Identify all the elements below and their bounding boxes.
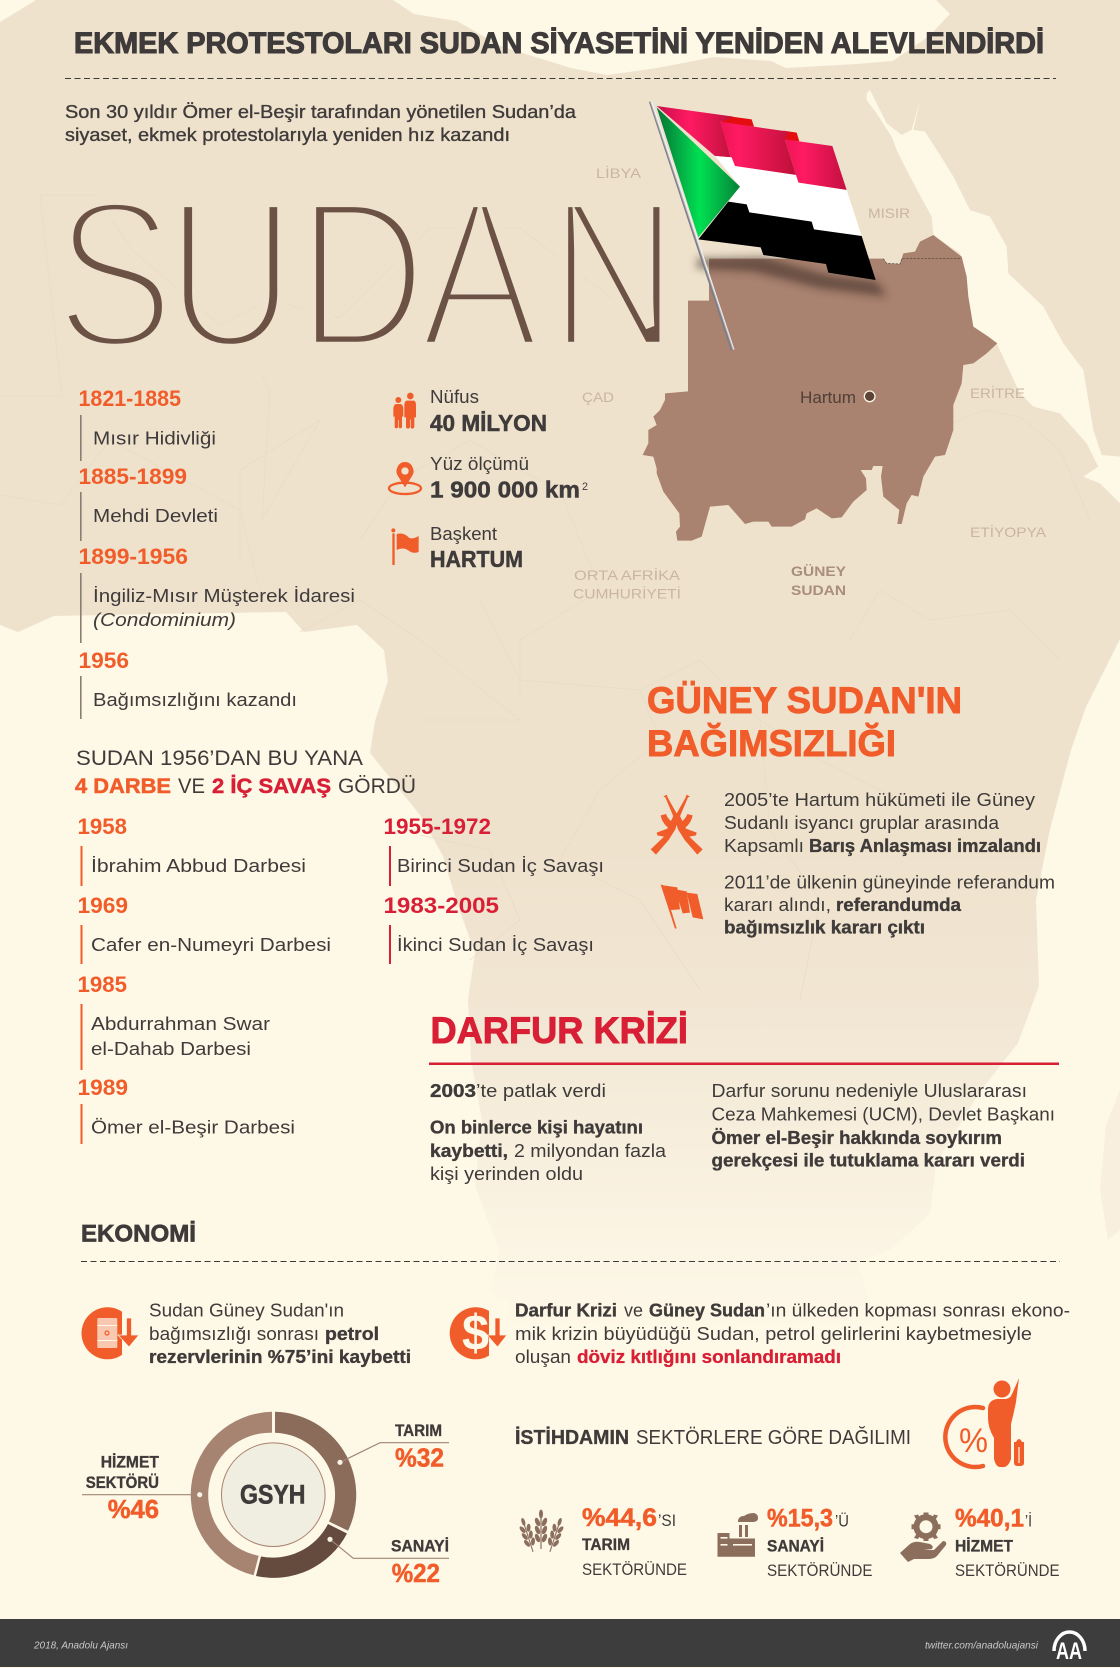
flag of Sudan [651,101,887,350]
timeline: Sudan history: Mısır Hidivliği [93,428,216,448]
icon: dollar with down arrow [450,1300,509,1366]
logo: AA: AA [1056,1638,1082,1665]
heading: SUDAN: SUDAN [55,157,679,392]
timeline: coups: el-Dahab Darbesi [91,1039,251,1059]
text: peace agreement: 2005’te Hartum hükümeti ile Güney [724,790,1035,810]
map labels: MISIR [868,205,910,221]
map labels: ORTA AFRİKA [574,566,681,583]
map labels: ETİYOPYA [970,523,1047,540]
stat: industry employment: ’Ü [835,1512,849,1531]
callout: services: SEKTÖRÜ [86,1473,159,1492]
label: Hartum: Hartum [800,388,856,407]
timeline: Sudan history: 1821-1885 [78,386,181,411]
heading: coups and civil wars: 2 İÇ SAVAŞ [212,775,331,798]
timeline: coups [78,814,331,1144]
timeline: civil wars [384,814,604,964]
intro text: siyaset, ekmek protestolarıyla yeniden hız kazandı [65,125,510,145]
text: left column: On binlerce kişi hayatını [430,1118,643,1138]
block: oil reserves: petrol [325,1324,379,1344]
intro text: Son 30 yıldır Ömer el-Beşir tarafından yönetilen Sudan’da [65,102,577,122]
icon: worker with percent [945,1378,1024,1467]
icon: waving flag [661,885,703,929]
text: left column: ’te patlak verdi [476,1081,606,1101]
block: currency shortage: ve [624,1300,643,1320]
text: peace agreement: Kapsamlı [724,836,804,856]
footer handle: twitter.com/anadoluajansi [925,1640,1039,1652]
text: left column [430,1081,667,1184]
text: left column: kaybetti, [430,1141,508,1161]
text: peace agreement: Sudanlı isyancı gruplar arasında [724,813,1000,833]
text: right column: Ömer el-Beşir hakkında soykırım [712,1128,1002,1148]
chart: GDP donut [82,1412,449,1588]
heading: employment by sector: SEKTÖRLERE GÖRE DAĞILIMI [636,1426,911,1449]
icon: factory [718,1513,758,1557]
block: currency shortage: ’ın ülkeden kopması sonrası ekono- [766,1300,1070,1320]
heading: coups and civil wars: VE [178,775,205,798]
stat: industry employment: SEKTÖRÜNDE [767,1561,872,1580]
block: currency shortage: mik krizin büyüdüğü Sudan, petrol gelirlerini kaybetmesiyle [515,1324,1032,1344]
stat: services employment: SEKTÖRÜNDE [955,1561,1060,1580]
segment: services 46% [191,1412,272,1575]
capital marker [864,391,875,402]
heading: BAĞIMSIZLIĞI [647,723,896,764]
icon: people [393,393,416,429]
callout: industry: SANAYİ [391,1537,449,1556]
stat: capital [391,524,523,572]
block: currency shortage: oluşan [515,1347,571,1367]
map: Sudan [643,235,997,541]
heading: employment by sector [515,1426,911,1449]
stat: population: 40 MİLYON [430,410,547,436]
heading: coups and civil wars: SUDAN 1956’DAN BU YANA [76,747,363,770]
block: currency shortage: Güney Sudan [649,1300,765,1320]
heading: GÜNEY SUDAN'IN [647,680,962,721]
stat: agriculture employment: SEKTÖRÜNDE [582,1560,687,1579]
text: referendum: bağımsızlık kararı çıktı [724,918,925,938]
timeline: coups: 1985 [78,972,127,997]
icon: crossed rifles [651,795,703,855]
text: left column: 2003 [430,1081,476,1101]
text: right column: Darfur sorunu nedeniyle Uluslararası [712,1081,1027,1101]
icon: oil barrel with down arrow [82,1300,142,1366]
timeline: Sudan history: 1956 [78,648,129,673]
text: referendum: referandumda [836,895,962,915]
callout: services: %46 [108,1494,159,1524]
text: peace agreement [724,790,1041,856]
timeline: coups: 1989 [78,1075,128,1100]
stat: agriculture employment: TARIM [582,1535,630,1554]
stat: population: Nüfus [430,387,479,407]
timeline: coups: 1969 [78,893,128,918]
block: currency shortage: döviz kıtlığını sonlandıramadı [577,1347,841,1367]
timeline: coups: Cafer en-Numeyri Darbesi [91,935,331,955]
block: oil reserves: rezervlerinin %75’ini kaybetti [149,1347,411,1367]
icon: gear on hand [900,1512,946,1562]
stat: capital: Başkent [430,524,497,544]
stat: capital: HARTUM [430,546,523,572]
callout: agriculture: TARIM [395,1421,442,1440]
heading: DARFUR KRİZİ [430,1010,688,1051]
text: referendum: 2011’de ülkenin güneyinde referandum [724,872,1055,892]
map labels: SUDAN [791,582,846,598]
text: left column: kişi yerinden oldu [430,1164,583,1184]
text: right column: Ceza Mahkemesi (UCM), Devlet Başkanı [712,1104,1055,1124]
footer credit: 2018, Anadolu Ajansı [33,1640,128,1652]
heading: employment by sector: İSTİHDAMIN [515,1426,629,1449]
center disc [221,1443,325,1546]
icon: worker with percent: % [959,1422,988,1460]
block: oil reserves: bağımsızlığı sonrası [149,1324,319,1344]
timeline: civil wars: 1955-1972 [384,814,491,839]
block: currency shortage [450,1300,1070,1367]
title: EKMEK PROTESTOLARI SUDAN SİYASETİNİ YENİDEN ALEVLENDİRDİ [74,27,1044,60]
icon: flag [391,528,419,565]
stat: agriculture employment: ’SI [658,1511,676,1530]
stat: area: 2 [582,481,588,493]
stat: population [393,387,547,436]
stat: area: Yüz ölçümü [430,454,529,474]
logo: AA [1054,1632,1085,1665]
timeline: Sudan history: (Condominium) [93,610,236,630]
segment: agriculture 32% [275,1412,356,1531]
text: right column: gerekçesi ile tutuklama kararı verdi [712,1150,1025,1170]
map labels [573,164,1047,602]
timeline: Sudan history: İngiliz-Mısır Müşterek İdaresi [93,586,355,606]
stat: agriculture employment: %44,6 [582,1504,657,1532]
stat: area: 1 900 000 km [430,476,580,502]
timeline: Sudan history: 1899-1956 [78,544,188,569]
timeline: civil wars: İkinci Sudan İç Savaşı [397,935,594,955]
text: referendum [724,872,1055,938]
stat: industry employment: SANAYİ [767,1537,824,1556]
text: referendum: kararı alındı, [724,895,831,915]
callout: industry [327,1537,449,1588]
icon: map pin [389,462,421,494]
map labels: CUMHURİYETİ [573,584,681,602]
panel: Darfur crisis [429,1010,1059,1184]
timeline: coups: Ömer el-Beşir Darbesi [91,1118,295,1138]
text: left column: 2 milyondan fazla [514,1141,667,1161]
center label: GSYH [240,1480,306,1510]
map labels: GÜNEY [791,563,847,579]
segment: industry 22% [256,1524,347,1578]
timeline: coups: Abdurrahman Swar [91,1014,270,1034]
footer bar [0,1619,1120,1667]
heading [647,680,962,764]
stat: services employment: %40,1 [955,1505,1024,1533]
map labels: LİBYA [596,164,642,181]
map labels: ÇAD [582,389,614,405]
timeline: Sudan history: 1885-1899 [78,464,187,489]
callout: agriculture: %32 [395,1443,444,1473]
stat: services employment [900,1505,1060,1580]
timeline: Sudan history: Mehdi Devleti [93,506,218,526]
heading: coups and civil wars [75,747,416,798]
block: currency shortage: Darfur Krizi [515,1300,617,1320]
stat: industry employment [718,1505,872,1580]
icon: wheat [516,1510,567,1554]
text: peace agreement: Barış Anlaşması imzalandı [809,836,1041,856]
map labels: ERİTRE [970,384,1025,401]
callout: services [82,1453,202,1524]
timeline: coups: İbrahim Abbud Darbesi [91,856,306,876]
block: oil reserves: Sudan Güney Sudan'ın [149,1300,344,1320]
heading: coups and civil wars: GÖRDÜ [338,775,416,798]
stat: agriculture employment [516,1504,687,1579]
panel: South Sudan independence [647,680,1055,938]
callout: services: HİZMET [101,1453,160,1472]
intro text [65,102,577,145]
icon: dollar with down arrow: $ [462,1305,489,1361]
timeline: civil wars: Birinci Sudan İç Savaşı [397,856,604,876]
callout: agriculture [337,1421,449,1473]
stat: services employment: ’İ [1025,1512,1032,1531]
callout: industry: %22 [392,1558,440,1588]
timeline: civil wars: 1983-2005 [384,893,499,918]
heading: economy: EKONOMİ [81,1220,196,1248]
stat: services employment: HİZMET [955,1537,1014,1556]
timeline: Sudan history [78,386,355,719]
timeline: Sudan history: Bağımsızlığını kazandı [93,690,297,710]
heading: coups and civil wars: 4 DARBE [75,775,171,798]
timeline: coups: 1958 [78,814,127,839]
stat: area [389,454,588,502]
stat: industry employment: %15,3 [767,1505,833,1533]
text: right column [712,1081,1055,1170]
block: oil reserves [82,1300,411,1367]
